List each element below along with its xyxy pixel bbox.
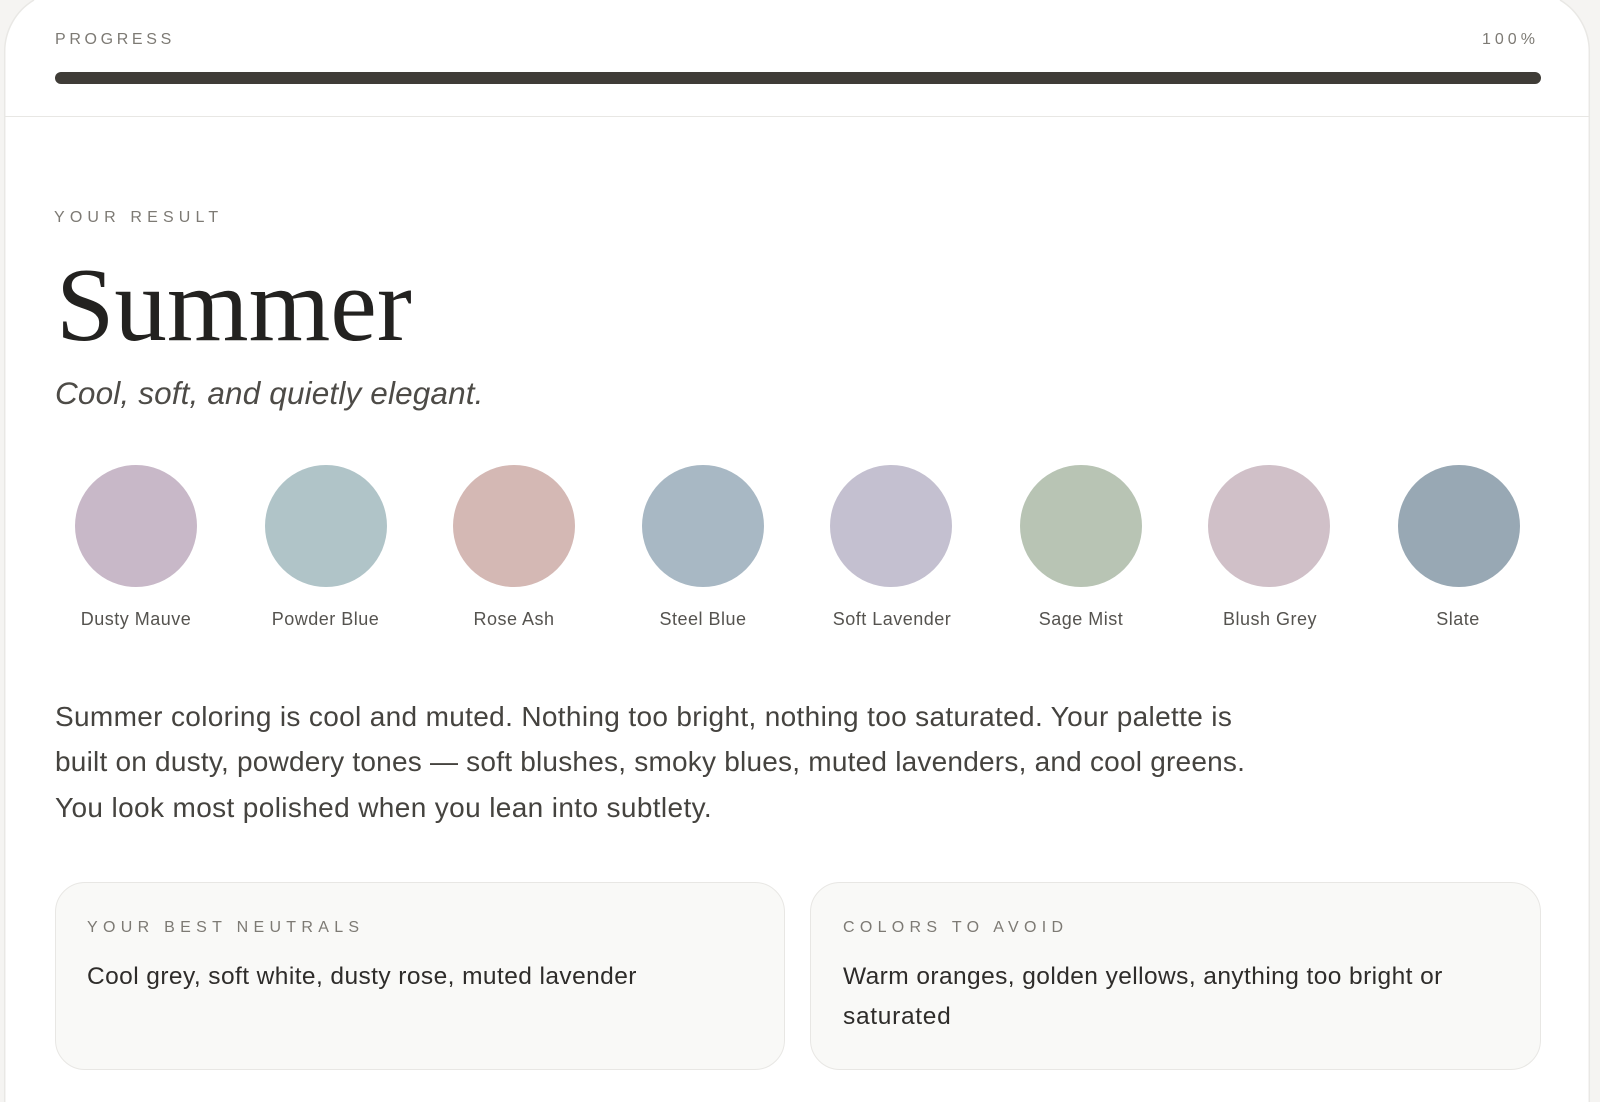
swatch: Dusty Mauve xyxy=(75,465,197,587)
label: Blush Grey: Blush Grey xyxy=(1223,609,1317,629)
swatch: Slate xyxy=(1398,465,1520,587)
description: built on dusty, powdery tones — soft blushes, smoky blues, muted lavenders, and cool greens. xyxy=(55,746,1245,776)
swatch: Rose Ash xyxy=(452,465,574,587)
avoid heading: COLORS TO AVOID xyxy=(843,919,1068,936)
tagline: Cool, soft, and quietly elegant. xyxy=(55,375,484,411)
swatch: Blush Grey xyxy=(1208,465,1330,587)
swatch: Sage Mist xyxy=(1020,465,1142,587)
title: Summer xyxy=(56,246,412,363)
panel: your best neutrals xyxy=(55,882,785,1070)
palette swatches xyxy=(75,465,1520,629)
label: Steel Blue: Steel Blue xyxy=(659,609,747,629)
label: Soft Lavender: Soft Lavender xyxy=(833,609,951,629)
progress label: PROGRESS xyxy=(55,31,175,48)
avoid text xyxy=(843,963,1443,1030)
swatch: Powder Blue xyxy=(264,465,386,587)
label: Powder Blue: Powder Blue xyxy=(272,609,379,629)
description: You look most polished when you lean into subtlety. xyxy=(55,792,712,822)
description: Summer coloring is cool and muted. Nothing too bright, nothing too saturated. Your palette is xyxy=(55,700,1232,732)
label: Slate: Slate xyxy=(1436,609,1480,629)
neutrals heading: YOUR BEST NEUTRALS xyxy=(87,919,364,936)
description xyxy=(55,700,1245,823)
panel: colors to avoid xyxy=(810,882,1541,1070)
avoid text: Warm oranges, golden yellows, anything too bright or xyxy=(843,963,1443,990)
progress percentage: 100% xyxy=(1482,31,1539,48)
label: Rose Ash: Rose Ash xyxy=(473,609,555,629)
label: Sage Mist: Sage Mist xyxy=(1039,609,1123,629)
swatch: Steel Blue xyxy=(642,465,764,587)
label: Dusty Mauve: Dusty Mauve xyxy=(81,609,191,629)
neutrals text: Cool grey, soft white, dusty rose, muted lavender xyxy=(87,963,637,990)
avoid text: saturated xyxy=(843,1003,951,1030)
eyebrow: your result: YOUR RESULT xyxy=(54,209,223,226)
progress bar xyxy=(55,72,1541,84)
swatch: Soft Lavender xyxy=(830,465,952,587)
